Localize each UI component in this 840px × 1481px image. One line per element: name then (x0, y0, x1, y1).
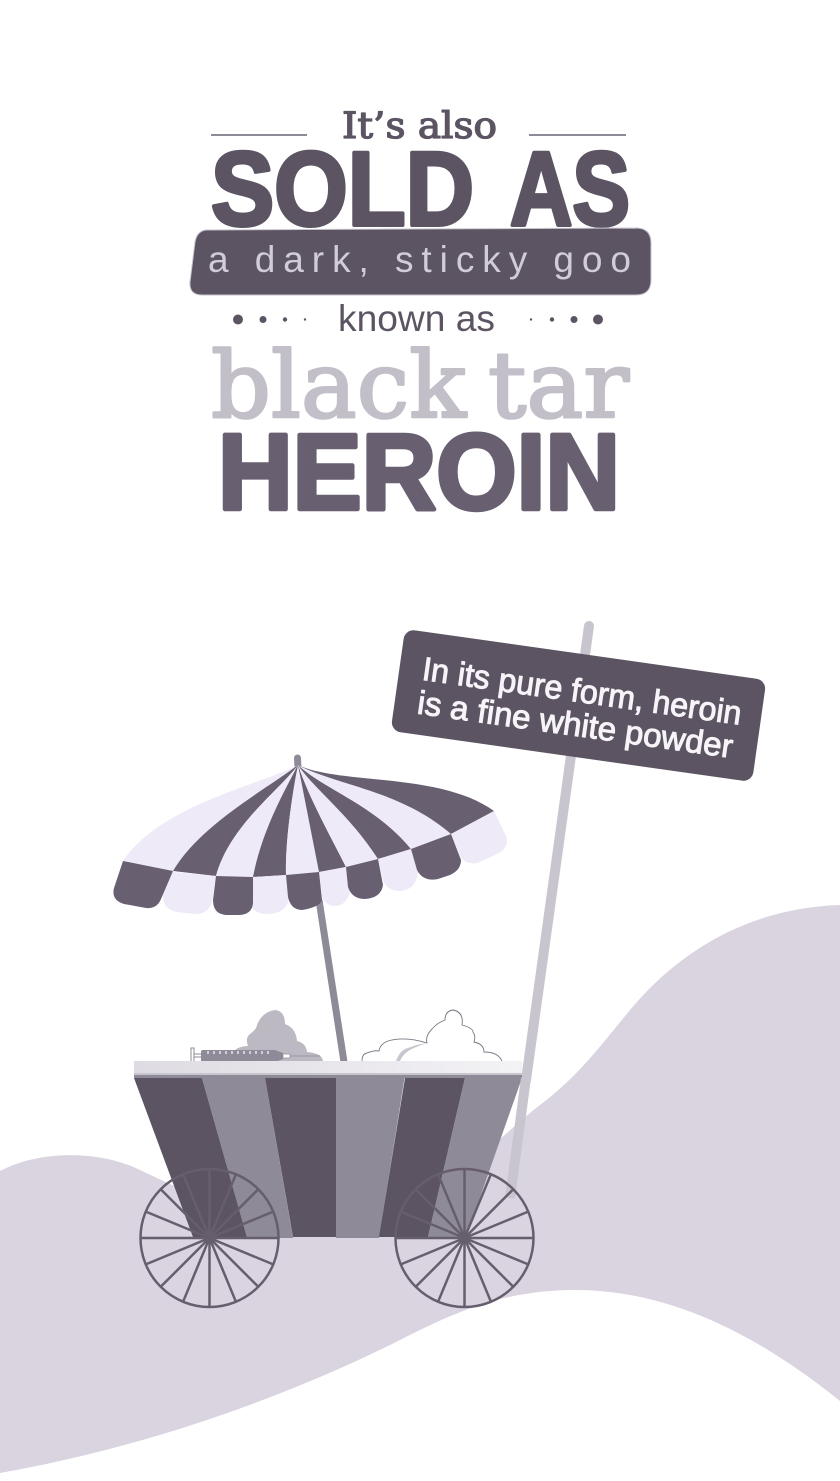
goo banner (190, 228, 651, 295)
heading line: black tar (211, 332, 629, 439)
heading line: SOLD AS (211, 131, 630, 248)
right rule (529, 134, 626, 136)
sign pole (526, 626, 589, 1080)
brown powder pile (233, 1010, 323, 1061)
umbrella pole (319, 900, 344, 1062)
sign (391, 629, 766, 782)
heading line: black tar: tar (488, 332, 629, 439)
left rule (211, 134, 307, 136)
sign text (415, 650, 744, 765)
title block (190, 106, 651, 532)
sign pole lower section (510, 1078, 526, 1198)
heading line: black tar: black (211, 332, 467, 439)
heading line: SOLD AS: SOLD (211, 131, 474, 248)
sign text: is a fine white powder (415, 684, 735, 765)
right dots (530, 314, 603, 324)
heading line: It's also: It’s also (342, 106, 497, 147)
cart table top (134, 1061, 522, 1078)
sign text: In its pure form, heroin (420, 650, 744, 732)
right wheel (396, 1169, 534, 1307)
text: known as: known as (338, 298, 495, 339)
left dots (233, 314, 306, 324)
canopy panels (123, 765, 494, 877)
umbrella tip (294, 758, 302, 768)
heading line: HEROIN: HEROIN (218, 411, 620, 532)
banner text: a dark, sticky goo (208, 239, 631, 280)
scallops (113, 811, 507, 915)
background hills (0, 905, 840, 1473)
white powder pile (362, 1010, 502, 1061)
umbrella (113, 758, 507, 915)
syringe (191, 1048, 320, 1063)
cart body stripes (134, 1075, 522, 1238)
left wheel (140, 1169, 278, 1307)
heading line: SOLD AS: AS (510, 131, 630, 248)
